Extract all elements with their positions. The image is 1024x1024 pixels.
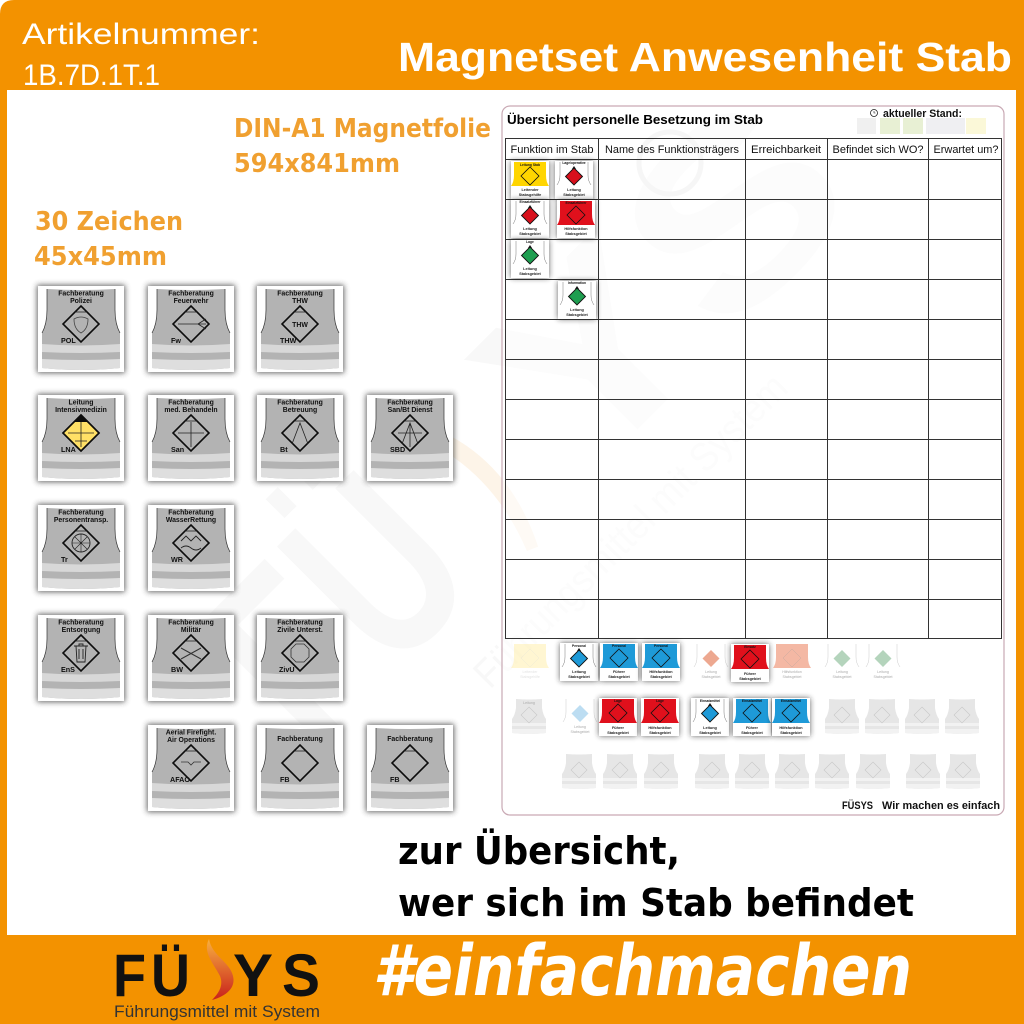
row 2 magnets: Einsatzmittel (700, 699, 720, 703)
icon: flame (207, 939, 234, 1000)
magnet: green leader: Lage (526, 240, 534, 244)
sign: THW: Fachberatung (277, 290, 323, 298)
sign: Militär: Fachberatung (168, 620, 214, 626)
row 1 magnets: Leitung (836, 670, 848, 674)
sign: THW (256, 285, 344, 373)
row 1 magnets: Stabsgebiet (568, 675, 590, 679)
label: sign count: 30 Zeichen (35, 207, 183, 237)
article number: Artikelnummer: (22, 18, 260, 51)
sign: WasserRettung: Fachberatung (168, 510, 214, 516)
sign: med. Behandeln (147, 394, 235, 482)
sign: Entsorgung (37, 614, 125, 702)
article number (22, 18, 260, 92)
sign: Fachberatung blank 1 (256, 724, 344, 812)
FÜSYS logo: Ü (151, 942, 190, 1009)
article number: 1B.7D.1T.1 (23, 59, 160, 92)
sign: San/Bt Dienst: Fachberatung (387, 400, 433, 406)
row 1 magnets: Leitung (877, 670, 889, 674)
magnet: Leitung Stab yellow: Leitung Stab (520, 163, 540, 167)
sign: Polizei (37, 285, 125, 373)
label: board size: DIN-A1 Magnetfolie (234, 114, 491, 144)
watermark logo (153, 42, 928, 817)
table headers: Name des Funktionsträgers (605, 144, 739, 156)
magnet: green information: Leitung (570, 308, 585, 312)
sign: Fachberatung blank 1: Fachberatung (277, 736, 323, 743)
row 1 magnets: Stabsgebiet (874, 675, 892, 679)
board title: Übersicht personelle Besetzung im Stab (507, 112, 763, 127)
watermark ring (639, 132, 701, 194)
sign: Militär (147, 614, 235, 702)
magnet: red leader 2: Einsatzführer (519, 200, 541, 204)
sign: Fachberatung blank 2 (366, 724, 454, 812)
caption: zur Übersicht, (398, 829, 680, 873)
sign: Betreuung (256, 394, 344, 482)
sign: Zivile Unterstützung: ZivU (279, 665, 295, 674)
row 2 magnets (512, 698, 979, 736)
sign: Polizei: POL (61, 336, 76, 345)
table headers: Erreichbarkeit (751, 144, 821, 156)
row 1 magnets: Stabsgebiet (739, 677, 761, 681)
magnet: green information (558, 281, 596, 319)
row 1 magnets: Personal (654, 644, 668, 648)
magnet: red leader (555, 161, 593, 199)
watermark logo: FÜ (153, 424, 520, 791)
row 1 magnets: Stabsgebiet (783, 675, 801, 679)
row 2 magnets: Leitung (523, 701, 535, 705)
magnet: red leader 2: Stabsgebiet (519, 232, 541, 236)
row 2 magnets: Stabsgebiet (741, 731, 763, 735)
magnet: red leader 2 (511, 200, 549, 238)
sign: Militär: BW (171, 665, 183, 674)
row 2 magnets: Stabsgebiet (699, 731, 721, 735)
label: board size: 594x841mm (234, 149, 400, 179)
row 1 magnets (511, 643, 900, 682)
board footer logo and slogan (842, 799, 1000, 812)
magnet: green leader: Stabsgebiet (519, 272, 541, 276)
row 2 magnets: Stabsgebiet (780, 731, 802, 735)
magnet: red full (557, 200, 595, 238)
sign: Zivile Unterstützung: Zivile Unterst. (277, 627, 323, 634)
row 1 magnets: Hilfsfunktion (649, 670, 673, 674)
sign: Betreuung: Betreuung (283, 407, 317, 414)
sign: Leitung Intensivmedizin (37, 394, 125, 482)
FÜSYS logo: F (113, 942, 146, 1009)
table headers: Befindet sich WO? (832, 144, 924, 156)
sign: WasserRettung (147, 504, 235, 592)
panel: 30 magnet signs (37, 285, 454, 812)
sign: Zivile Unterstützung: Fachberatung (277, 620, 323, 626)
sign: Fachberatung blank 2: Fachberatung (387, 736, 433, 743)
row 3 faded signs (562, 754, 980, 789)
board footer logo and slogan: Wir machen es einfach (882, 800, 1000, 812)
row 2 magnets: Hilfsfunktion (779, 726, 803, 730)
sign: THW: THW (292, 322, 308, 329)
sign: WasserRettung: WasserRettung (166, 517, 216, 524)
sign: THW: THW (280, 336, 297, 345)
caption (398, 829, 914, 925)
row 2 magnets: Hilfsfunktion (648, 726, 672, 730)
row 1 magnets: Hilfsfunktion (782, 670, 802, 674)
sign: Polizei: Fachberatung (58, 290, 104, 298)
watermark logo: YS (422, 42, 902, 522)
row 1 magnets: Leitung (705, 670, 717, 674)
magnet: green information: Stabsgebiet (566, 313, 588, 317)
magnet: Leitung Stab yellow: Stabsgehilfe (519, 193, 541, 197)
magnet: red full: Einsatzführer (565, 201, 587, 205)
sign: Polizei: Polizei (70, 298, 92, 305)
sign: San/Bt Dienst: San/Bt Dienst (388, 407, 433, 414)
sign: Personentransport: Fachberatung (58, 510, 104, 516)
sign: Personentransport: Personentransp. (54, 517, 108, 524)
magnet: red leader 2: Leitung (523, 227, 538, 231)
sign: med. Behandeln: Fachberatung (168, 400, 214, 406)
sign: Leitung Intensivmedizin: LNA (61, 445, 76, 454)
sign: Entsorgung: Fachberatung (58, 620, 104, 626)
hashtag slogan: #einfachmachen (373, 930, 912, 1012)
table headers (510, 144, 998, 156)
table headers: Erwartet um? (934, 144, 998, 156)
row 1 magnets: Stabsgebiet (702, 675, 720, 679)
sign: Feuerwehr: Fw (171, 336, 181, 345)
row 2 magnets: Führer (612, 726, 625, 730)
sign: Fachberatung blank 1: FB (280, 775, 290, 784)
board footer logo and slogan: FÜSYS (842, 799, 873, 812)
current status fields: aktueller Stand: (883, 108, 962, 120)
row 1 magnets: Führer (613, 670, 626, 674)
sign: San/Bt Dienst (366, 394, 454, 482)
FÜSYS logo: S (282, 942, 320, 1009)
magnet: Leitung Stab yellow: Leitender (521, 188, 539, 192)
row 1 magnets: Stabsgehilfe (520, 675, 540, 679)
row 1 magnets: Stabsgebiet (608, 675, 630, 679)
magnet: red leader: Lage/operative (562, 161, 586, 165)
caption: wer sich im Stab befindet (398, 881, 914, 925)
sign: Entsorgung: Entsorgung (62, 627, 100, 634)
label: board size (234, 114, 491, 179)
FÜSYS logo: Y (233, 942, 273, 1009)
sign: Entsorgung: EnS (61, 665, 75, 674)
sign: Aerial Firefighting: Aerial Firefight. (166, 730, 216, 736)
sign: Personentransport (37, 504, 125, 592)
row 2 magnets: Stabsgebiet (607, 731, 629, 735)
row 1 magnets: Leitung (572, 670, 587, 674)
row 2 magnets: Einsatzmittel (742, 699, 762, 703)
sign: Feuerwehr (147, 285, 235, 373)
row 1 magnets: Personal (572, 644, 586, 648)
sign: THW: THW (292, 298, 308, 305)
row 2 magnets: Leitung (703, 726, 718, 730)
row 2 magnets: Leitung (574, 725, 586, 729)
sign: Betreuung: Fachberatung (277, 400, 323, 406)
sign: Leitung Intensivmedizin: Leitung (69, 400, 93, 406)
sign: Betreuung: Bt (280, 445, 288, 454)
row 1 magnets: Führer (744, 672, 757, 676)
table (505, 138, 1002, 639)
sign: Fachberatung blank 2: FB (390, 775, 400, 784)
row 2 magnets: Stabsgebiet (649, 731, 671, 735)
magnet: red full: Stabsgebiet (565, 232, 587, 236)
sign: Personentransport: Tr (61, 555, 68, 564)
panel: board (502, 106, 1004, 815)
row 2 magnets: Einsatzmittel (781, 699, 801, 703)
magnet: Leitung Stab yellow (511, 161, 549, 199)
current status fields (857, 108, 986, 134)
magnets placed in table (511, 161, 596, 319)
row 2 magnets: Führer (746, 726, 759, 730)
row 1 magnets: Stabsgebiet (833, 675, 851, 679)
magnet storage area (511, 643, 980, 789)
sign: Militär: Militär (181, 627, 201, 634)
sign: Aerial Firefighting: Air Operations (167, 737, 215, 744)
row 1 magnets: Leitender (522, 670, 538, 674)
row 2 magnets: Lage (656, 699, 664, 703)
sign: med. Behandeln: San (171, 445, 184, 454)
sign: Feuerwehr: Feuerwehr (174, 298, 209, 305)
row 1 magnets: Personal (612, 644, 626, 648)
magnet: red leader: Leitung (567, 188, 582, 192)
magnet: red full: Hilfsfunktion (564, 227, 588, 231)
sign: Feuerwehr: Fachberatung (168, 290, 214, 298)
magnet: green leader (511, 240, 549, 278)
row 1 magnets: Einsatz (744, 645, 756, 649)
watermark logo: Führungsmittel mit System (465, 365, 796, 696)
magnet: green leader: Leitung (523, 267, 538, 271)
sign: Aerial Firefighting: AFAO (170, 775, 190, 784)
sign: San/Bt Dienst: SBD (390, 445, 405, 454)
sign: Leitung Intensivmedizin: Intensivmedizin (55, 407, 107, 414)
table headers: Funktion im Stab (510, 144, 594, 156)
magnet: red leader: Stabsgebiet (563, 193, 585, 197)
sign: Zivile Unterstützung (256, 614, 344, 702)
sign: Aerial Firefighting (147, 724, 235, 812)
FÜSYS logo (113, 939, 320, 1021)
title: Magnetset Anwesenheit Stab (398, 34, 1012, 80)
row 1 magnets: Stabsgebiet (650, 675, 672, 679)
sign: med. Behandeln: med. Behandeln (164, 407, 218, 414)
row 2 magnets: Stabsgebiet (571, 730, 589, 734)
sign: WasserRettung: WR (171, 555, 184, 564)
row 2 magnets: Lage (614, 699, 622, 703)
magnet: green information: Information (568, 281, 586, 285)
label: sign count (34, 207, 183, 272)
label: sign count: 45x45mm (34, 242, 167, 272)
FÜSYS logo: Führungsmittel mit System (114, 1002, 320, 1021)
